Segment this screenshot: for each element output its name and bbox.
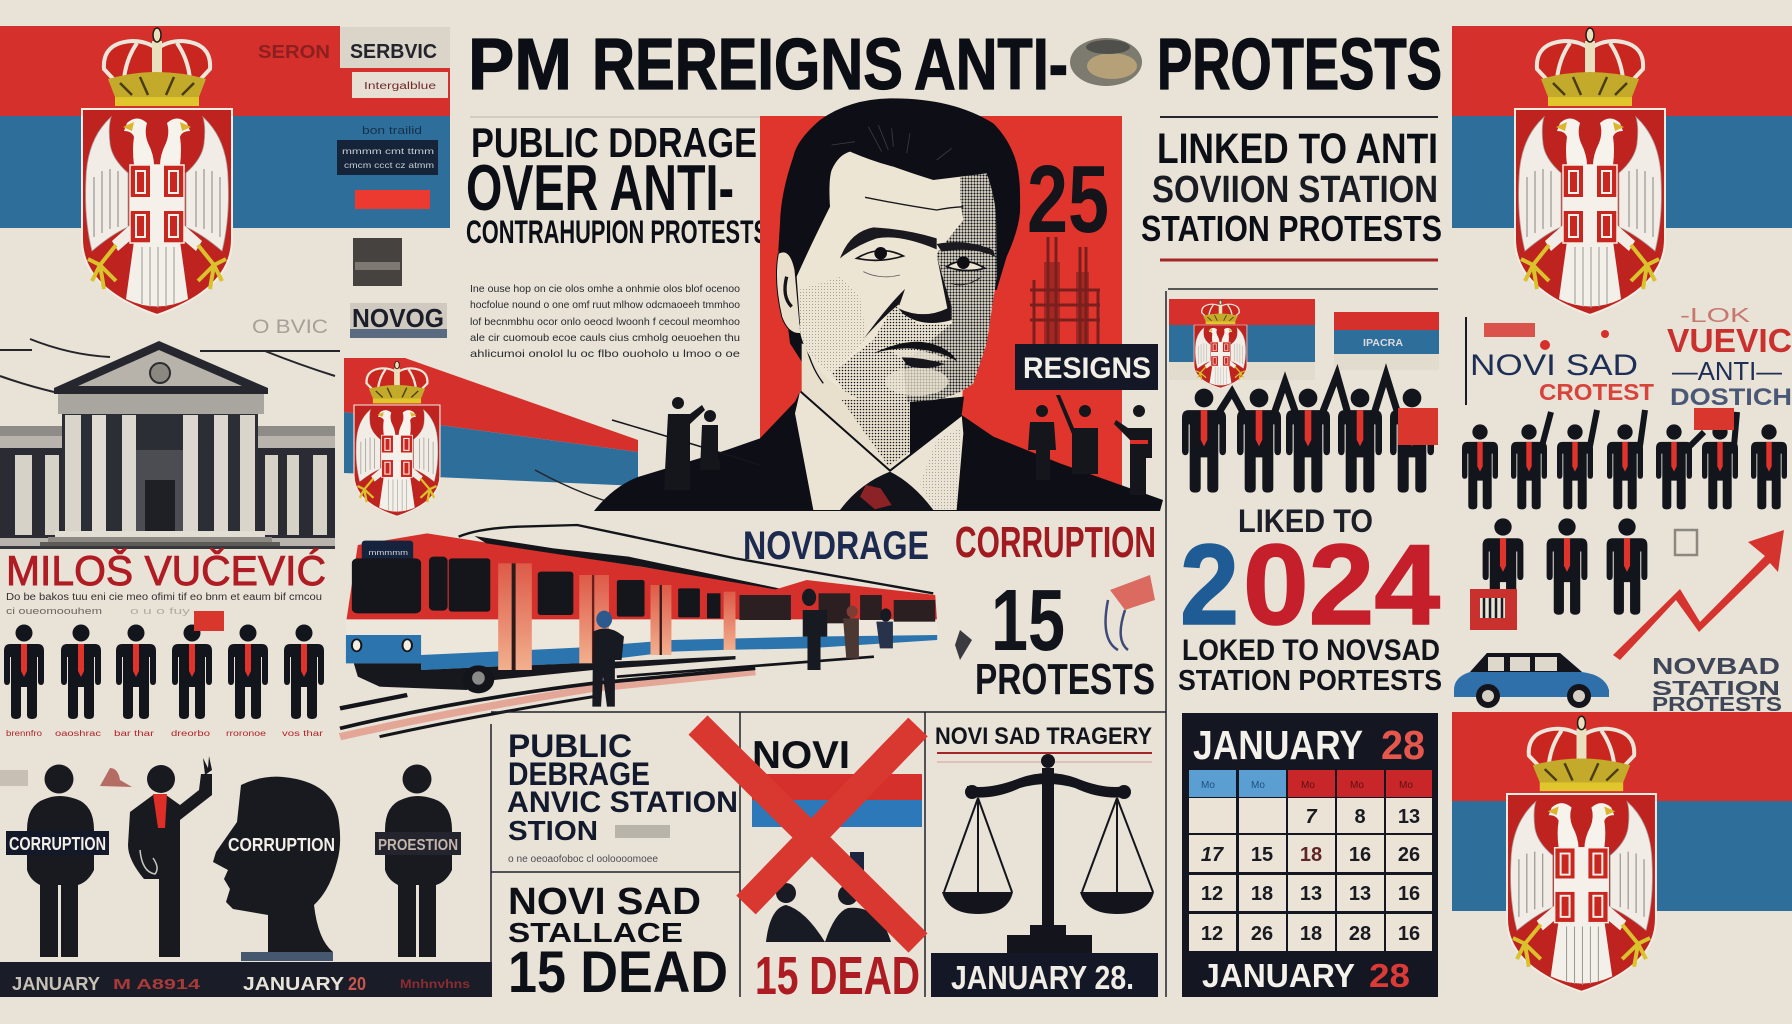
train body <box>346 533 937 693</box>
name: Milos Vucevic: o u o fuy <box>130 606 191 616</box>
bottom date bar: 20 <box>348 974 366 994</box>
calendar numbers: 26 <box>1398 844 1420 866</box>
pictogram row: six officials <box>4 611 324 738</box>
destination sign <box>362 541 413 561</box>
clipping: SERBVIC: SERBVIC <box>350 41 437 63</box>
stat: 2024 <box>1178 503 1442 697</box>
portrait: prime minister <box>594 98 1163 511</box>
chin highlight <box>885 368 948 396</box>
overhead wire <box>459 525 933 593</box>
label: novdrage: NOVDRAGE <box>743 524 929 568</box>
text block: body copy: ahlicumoi onolol lu oc flbo ouoholo u lmoo o oe <box>470 348 740 360</box>
crowd of seven <box>1462 408 1787 509</box>
label: novsad station protests <box>1652 653 1782 716</box>
bar red note: M A8914 <box>113 976 201 993</box>
neck <box>802 343 963 470</box>
figure with corruption label: CORRUPTION <box>9 834 106 854</box>
text block: body copy <box>470 283 740 360</box>
arrow: rising trend <box>1613 530 1784 660</box>
bottom date bar: Mnhnvhns <box>400 977 470 991</box>
panel: public debrage: o ne oeoaofoboc cl ooloooomoee <box>508 854 658 865</box>
panel: Novi Sad protest <box>1462 305 1792 509</box>
heading: public outrage: CONTRAHUPION PROTESTS <box>466 214 768 250</box>
title <box>468 25 1442 105</box>
panel: top-left Serbian flag <box>0 26 450 315</box>
calendar numbers: 17 <box>1201 844 1224 866</box>
nose <box>864 289 905 338</box>
face <box>797 152 997 405</box>
pictogram captions: rroronoe <box>226 729 267 738</box>
bottom date bar <box>0 962 492 997</box>
poster silhouettes: right <box>1028 395 1152 495</box>
bottom date bar: JANUARY <box>243 974 344 994</box>
text block: body copy: hocfolue nound o one omf ruut mlhow odcmaoeeh tmmhoo <box>470 299 740 311</box>
panel: Novi Sad protest: NOVI SAD <box>1470 349 1638 382</box>
flag with arms <box>1169 299 1315 388</box>
calendar header: Mo <box>1201 780 1215 791</box>
stat: 2024: LIKED TO <box>1238 503 1373 539</box>
title: PM <box>468 25 572 105</box>
destination sign: mmmmm <box>368 549 408 557</box>
text block: body copy: lof becnmbhu ocor onlo oeocd lwoonh f cecoul meomhoo <box>470 316 740 328</box>
calendar numbers: 18 <box>1300 923 1322 945</box>
panel: Novi Sad protest: VUEVIC <box>1667 322 1792 359</box>
coat of arms: top left <box>82 28 232 315</box>
tracks <box>340 657 874 737</box>
flag caption: SERON <box>258 42 330 62</box>
faded caption: O BVIC <box>252 317 328 338</box>
panel: public debrage: PUBLIC <box>508 728 632 764</box>
nose bridge highlight <box>898 253 950 317</box>
red x <box>698 725 918 943</box>
heading: linked to anti: LINKED TO ANTI <box>1157 125 1438 173</box>
name: Milos Vucevic: ci oueomoouhem <box>6 606 102 616</box>
title: REREIGNS <box>592 25 903 105</box>
pictogram captions: bar thar <box>114 729 154 738</box>
shirt <box>795 392 963 510</box>
panel: top-right flag <box>1452 26 1792 315</box>
illustration: corruption silhouettes <box>0 756 461 961</box>
calendar: JANUARY <box>1193 722 1363 768</box>
name subtitle: Do be bakos tuu eni cie meo ofimi tif eo bnm et eaum bif cmcou <box>6 592 322 603</box>
stat: 15 protests <box>955 572 1155 704</box>
eyebrows <box>840 227 937 258</box>
panel: second flag with arms <box>344 358 640 516</box>
panel: novi sad 15 dead: STALLACE <box>508 917 683 948</box>
hair strands <box>832 125 952 160</box>
calendar header: Mo <box>1251 780 1265 791</box>
title smudge <box>1070 38 1142 86</box>
panel: novi sad tragery scales: NOVI SAD TRAGERY <box>935 723 1152 750</box>
stat: 2024: 2 <box>1180 522 1239 649</box>
panel: Novi Sad protest: CROTEST <box>1539 379 1654 405</box>
calendar: JANUARY <box>1202 957 1355 994</box>
figure with protest label: PROESTION <box>378 837 458 854</box>
calendar numbers: 13 <box>1349 883 1371 905</box>
stat: 2024: STATION PORTESTS <box>1178 665 1442 697</box>
panel: novi sad 15 dead <box>508 881 728 1005</box>
calendar numbers: 18 <box>1300 844 1322 866</box>
calendar numbers: 12 <box>1201 883 1223 905</box>
panel: novi sad tragery scales: JANUARY 28. <box>951 959 1134 996</box>
figure raising arm <box>128 756 212 957</box>
label: novsad station protests: PROTESTS <box>1652 694 1782 716</box>
heading: public outrage: OVER ANTI- <box>466 151 734 224</box>
panel: small clippings column: bon trailid <box>362 125 422 137</box>
panel: Novi Sad protest: DOSTICH <box>1670 384 1792 411</box>
panel: public debrage: DEBRAGE <box>508 756 650 792</box>
label: corruption: CORRUPTION <box>955 518 1156 567</box>
pictogram trio with box <box>1470 518 1697 630</box>
mouth <box>873 342 957 362</box>
name: Milos Vucevic <box>6 547 326 616</box>
text block: body copy: ale cir cuomoub ecoe cauls cius cmholg oeuoehen thu <box>470 332 740 344</box>
panel: novi sad 15 dead: NOVI SAD <box>508 881 701 923</box>
panel: novi sad tragery scales <box>931 723 1158 997</box>
panel frame lines <box>491 291 1166 997</box>
lip highlight <box>892 350 948 361</box>
central poster: red background <box>760 116 1122 496</box>
stat: 2024: 024 <box>1243 522 1440 649</box>
stat: 15 protests: 15 <box>991 572 1065 669</box>
calendar numbers: 28 <box>1349 923 1371 945</box>
panel: public debrage <box>507 728 738 865</box>
heading: linked to anti <box>1141 117 1442 289</box>
face shading: dense <box>903 173 997 403</box>
coat of arms: bottom right <box>1507 716 1656 992</box>
panel: public debrage: STION <box>508 815 598 846</box>
panel: bottom-right flag <box>1452 712 1792 992</box>
calendar numbers: 26 <box>1251 923 1273 945</box>
stat: 15 protests: PROTESTS <box>975 655 1155 704</box>
calendar numbers: 15 <box>1251 844 1273 866</box>
panel: protest flags and crowd <box>1169 299 1439 493</box>
face shading: medium <box>832 290 952 405</box>
poster number 25: 25 <box>1027 146 1109 253</box>
icon: scales of justice <box>942 754 1154 953</box>
panel: public debrage: ANVIC STATION <box>507 786 738 819</box>
eyes <box>857 251 903 260</box>
calendar numbers: 16 <box>1349 844 1371 866</box>
panel: crossed out Novi flag: NOVI <box>752 734 850 777</box>
date bar <box>931 953 1158 997</box>
heading: linked to anti: SOVIION STATION <box>1152 169 1438 211</box>
pictogram captions: oaoshrac <box>55 729 101 738</box>
calendar numbers: 12 <box>1201 923 1223 945</box>
panel: small clippings column <box>252 27 450 338</box>
stat: 2024: LOKED TO NOVSAD <box>1182 634 1440 667</box>
icon: blue car <box>1454 653 1609 708</box>
poster towers <box>1030 237 1100 347</box>
calendar numbers: 13 <box>1300 883 1322 905</box>
pictogram captions: vos thar <box>282 729 323 738</box>
profile head with corruption label <box>213 777 340 961</box>
calendar <box>1182 713 1438 997</box>
profile head with corruption label: CORRUPTION <box>228 835 335 855</box>
calendar numbers: 7 <box>1305 806 1317 828</box>
tie <box>840 472 933 510</box>
clipping: NOVOG: NOVOG <box>352 303 444 333</box>
suit <box>594 392 1163 511</box>
clipping: small label: Intergalblue <box>364 81 437 92</box>
panel: crossed out Novi flag <box>698 725 922 1006</box>
calendar numbers: 18 <box>1251 883 1273 905</box>
pictogram captions: brennfro <box>6 729 43 738</box>
calendar header: Mo <box>1301 780 1315 791</box>
panel: novi sad 15 dead: 15 DEAD <box>508 940 728 1005</box>
coat of arms: small <box>354 361 440 516</box>
heading: public outrage: PUBLIC DDRAGE <box>471 119 757 166</box>
mourning silhouettes <box>766 883 891 942</box>
clipping: navy note: mmmm cmt ttmm <box>342 146 434 156</box>
ear <box>776 252 801 333</box>
calendar header: Mo <box>1350 780 1364 791</box>
panel: crossed out Novi flag: 15 DEAD <box>755 946 920 1006</box>
calendar numbers: 16 <box>1398 923 1420 945</box>
pictogram captions <box>6 729 323 738</box>
illustration: train <box>340 525 937 737</box>
pictogram captions: dreorbo <box>171 729 211 738</box>
crowd of five <box>1182 375 1438 493</box>
panel: Novi Sad protest: —ANTI— <box>1672 356 1782 386</box>
calendar grid <box>1189 798 1432 951</box>
forehead line <box>865 197 963 210</box>
calendar header: Mo <box>1399 780 1413 791</box>
illustration: capitol building <box>0 339 340 549</box>
calendar: 28 <box>1369 957 1410 994</box>
text block: body copy: Ine ouse hop on cie olos omhe a onhmie olos blof ocenoo <box>470 283 740 295</box>
name: Milos Vucevic: MILOŠ VUČEVIĆ <box>6 547 326 594</box>
heading: public outrage <box>466 117 768 250</box>
title: PROTESTS <box>1157 25 1442 105</box>
calendar numbers: 8 <box>1354 806 1366 828</box>
people on platform <box>592 589 893 707</box>
flag with label <box>1334 312 1439 370</box>
heading: linked to anti: STATION PROTESTS <box>1141 208 1442 249</box>
calendar: 28 <box>1381 722 1425 768</box>
windows and doors <box>352 557 935 623</box>
face shading: light <box>798 277 867 373</box>
label: novsad station protests: NOVBAD <box>1652 653 1780 679</box>
label: novsad station protests: STATION <box>1652 678 1780 700</box>
coat of arms: top right <box>1515 28 1665 315</box>
calendar numbers: 13 <box>1398 806 1420 828</box>
calendar numbers <box>1201 806 1420 945</box>
calendar header <box>1189 770 1432 797</box>
title: ANTI- <box>914 25 1068 105</box>
bottom date bar: JANUARY <box>12 974 100 994</box>
resigns label: RESIGNS <box>1023 352 1151 385</box>
hair <box>778 98 1020 362</box>
panel: small clippings column: cmcm ccct cz atmm <box>344 160 434 170</box>
figure with corruption label <box>6 764 109 957</box>
calendar numbers: 16 <box>1398 883 1420 905</box>
poster silhouettes: left <box>612 397 760 490</box>
resigns label <box>1015 344 1158 390</box>
faded top label: -LOK <box>1680 305 1751 327</box>
figure with protest label <box>375 764 461 957</box>
flag with label: IPACRA <box>1363 338 1403 349</box>
